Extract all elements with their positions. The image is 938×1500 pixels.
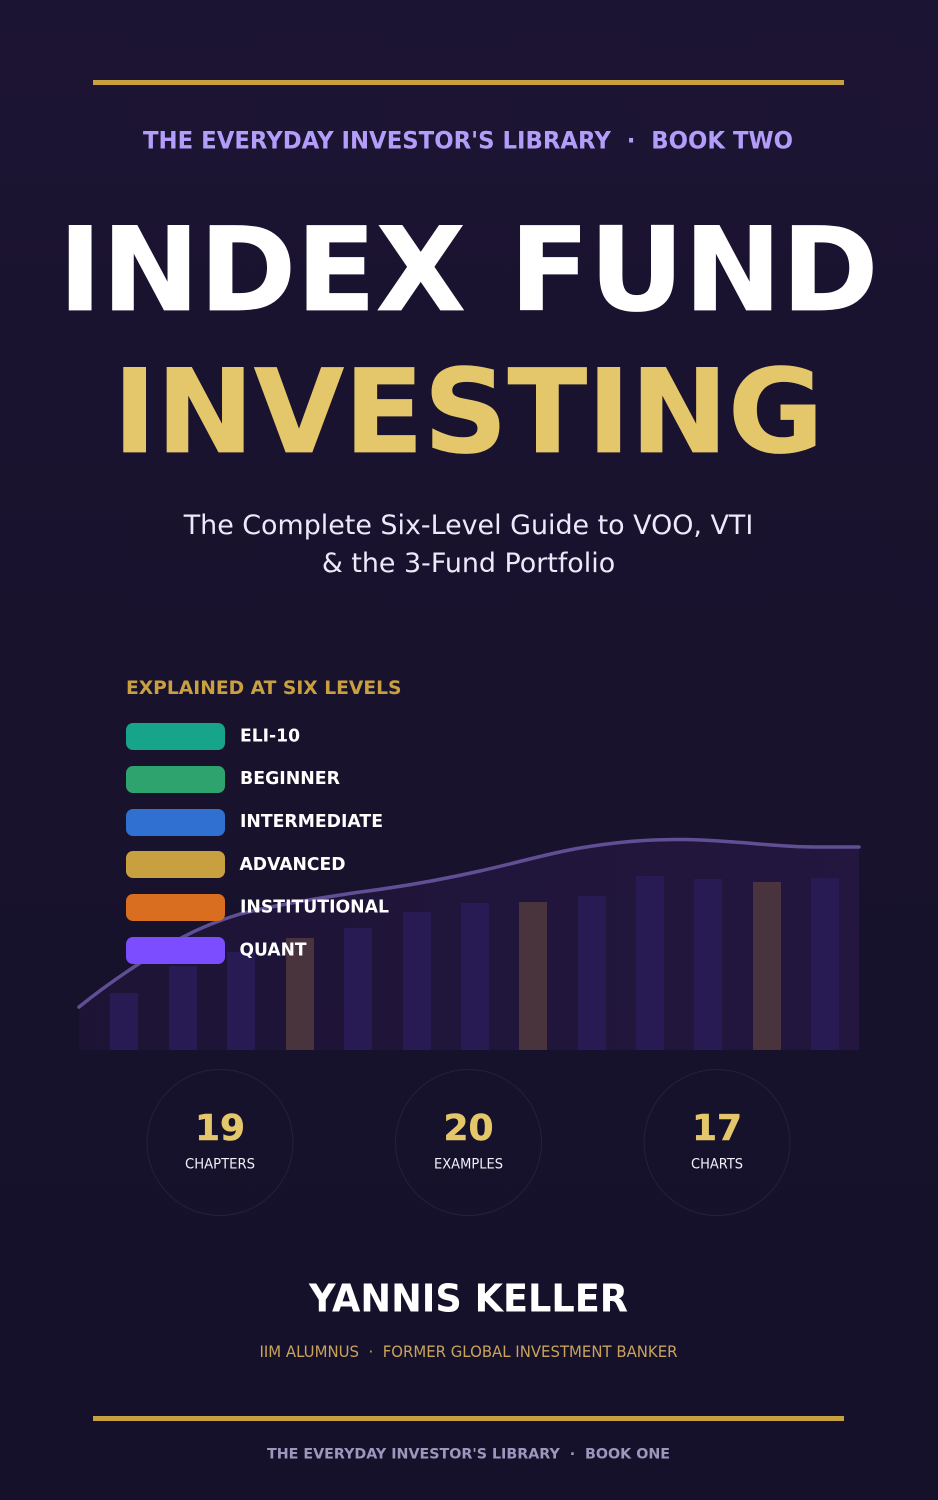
level: intermediate: INTERMEDIATE [240,811,383,832]
stat: charts: CHARTS [691,1156,743,1172]
stat: examples: 20 [443,1108,494,1149]
level: quant: QUANT [240,940,307,960]
highlighted chart bars [286,882,781,1050]
level list [126,723,389,964]
level: advanced [126,851,346,878]
level: beginner: BEGINNER [240,768,340,789]
stat: charts [644,1070,790,1216]
stat: chapters: CHAPTERS [185,1156,255,1172]
level: institutional: INSTITUTIONAL [240,896,389,918]
author name: YANNIS KELLER [308,1276,628,1320]
author credentials: IIM ALUMNUS · FORMER GLOBAL INVESTMENT BANKER [260,1342,678,1361]
level: intermediate [126,809,383,836]
level: advanced: ADVANCED [240,854,346,875]
stat: charts: 17 [692,1108,742,1149]
level: quant [126,937,307,964]
chart area fill [79,840,859,1050]
level: beginner [126,766,340,793]
chart bars [110,876,839,1050]
series line: THE EVERYDAY INVESTOR'S LIBRARY · BOOK TWO [143,126,793,154]
stat: chapters: 19 [195,1108,245,1149]
level: institutional [126,894,389,921]
subtitle [183,510,753,579]
stat: examples [396,1070,542,1216]
chart line [79,840,859,1007]
chart: growth curve with bars [79,840,859,1050]
bottom gold rule [93,1416,844,1421]
title: index fund: FUND [510,203,878,338]
levels heading: EXPLAINED AT SIX LEVELS [126,678,401,699]
level: eli-10: ELI-10 [240,726,300,746]
stat: examples: EXAMPLES [434,1156,503,1172]
stat: chapters [147,1070,293,1216]
footer series line: THE EVERYDAY INVESTOR'S LIBRARY · BOOK ONE [267,1446,670,1462]
subtitle: & the 3-Fund Portfolio [322,548,615,579]
top gold rule [93,80,844,85]
subtitle: The Complete Six-Level Guide to VOO, VTI [183,510,753,541]
title: index fund: INDEX [58,203,466,338]
title: investing: INVESTING [113,345,824,480]
level: eli-10 [126,723,300,750]
